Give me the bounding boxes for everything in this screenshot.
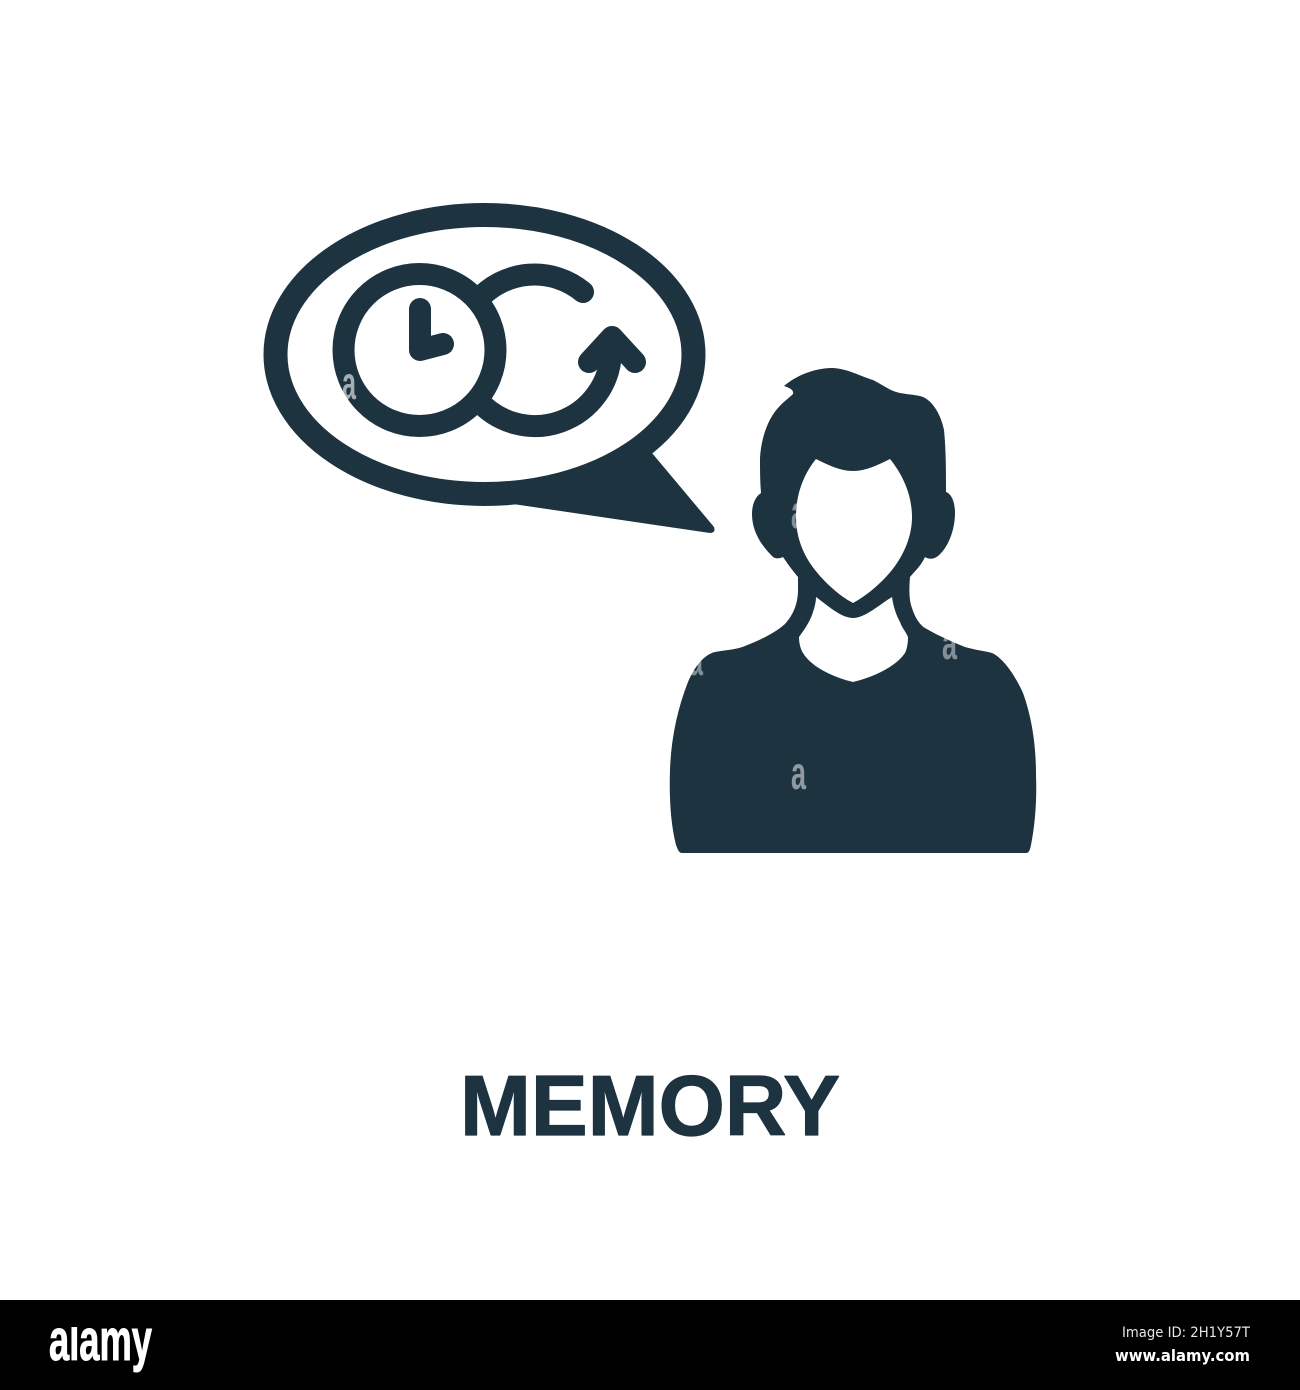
image id: Image ID: 2H1Y57T <box>1122 1325 1250 1341</box>
watermark on shoulder: a <box>942 617 957 669</box>
watermark letters <box>342 357 957 799</box>
watermark on chest: a <box>791 747 806 799</box>
watermark on left shoulder: a <box>689 633 703 685</box>
icon: person silhouette <box>670 368 1036 853</box>
arrow head <box>589 337 635 362</box>
watermark on clock: a <box>342 357 356 409</box>
website: www.alamy.com <box>1115 1346 1250 1365</box>
clock hands <box>420 309 443 350</box>
speech bubble outline <box>276 215 694 494</box>
icon: speech bubble with clock and replay arrow <box>276 215 714 533</box>
title: MEMORY <box>460 1059 840 1154</box>
replay arc upper <box>478 275 583 300</box>
replay arc lower <box>478 352 611 426</box>
watermark on hair: a <box>791 486 805 538</box>
speech bubble tail <box>513 450 714 533</box>
clock face <box>344 274 496 426</box>
alamy logo: alamy <box>49 1308 152 1373</box>
footer bar <box>0 1300 1300 1390</box>
